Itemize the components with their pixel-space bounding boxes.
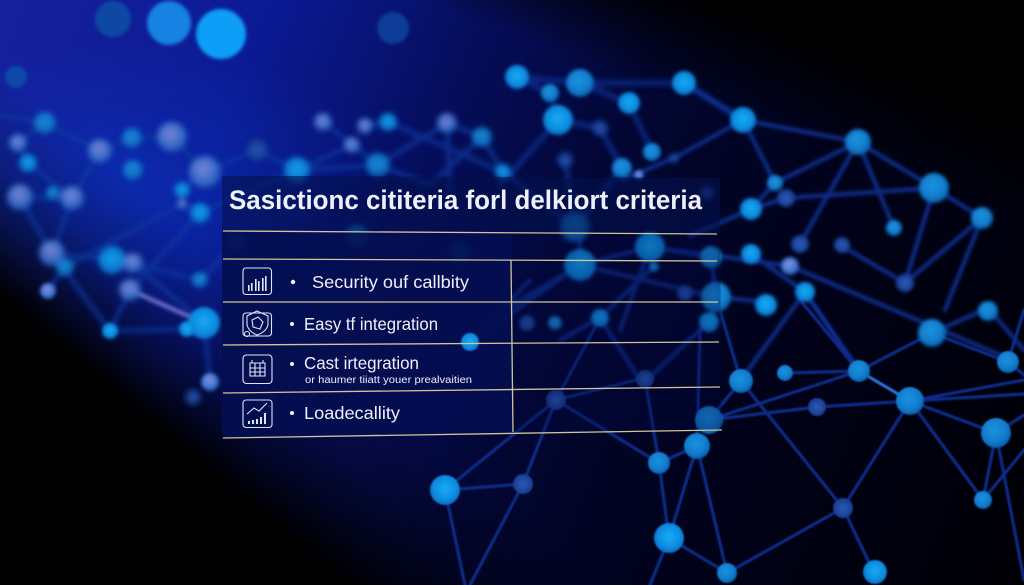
near edges [445, 292, 1024, 585]
purple edge [130, 290, 204, 323]
panel: left column background [222, 231, 512, 438]
panel: selection criteria table [222, 176, 722, 438]
row 3: bullet, label and note [290, 353, 472, 386]
near nodes [430, 351, 1019, 584]
panel: header background [222, 176, 720, 233]
row 2: bullet and label: Easy tf integration [304, 314, 438, 334]
node on table row line [461, 333, 479, 351]
far edges, blurred [0, 77, 743, 382]
panel: right column overlay [512, 233, 722, 434]
icon: calendar [243, 355, 272, 384]
far nodes [7, 112, 714, 405]
row 3: bullet, label and note: Cast irtegration [304, 353, 419, 373]
title: Sasictionc cititeria forl delkiort criteria [229, 185, 703, 215]
icon: bar chart [243, 268, 272, 294]
mid nodes [40, 65, 998, 391]
mid edges [470, 83, 1024, 385]
row 3: bullet, label and note: or haumer tiiatt youer prealvaitien [305, 374, 472, 386]
row 4: bullet and label: Loadecallity [304, 403, 400, 423]
table rules [223, 231, 722, 438]
row 1: bullet and label: Security ouf callbity [312, 272, 469, 292]
icon: growth chart [243, 400, 272, 428]
icon: shield network [243, 311, 272, 336]
bokeh lights [5, 1, 409, 88]
